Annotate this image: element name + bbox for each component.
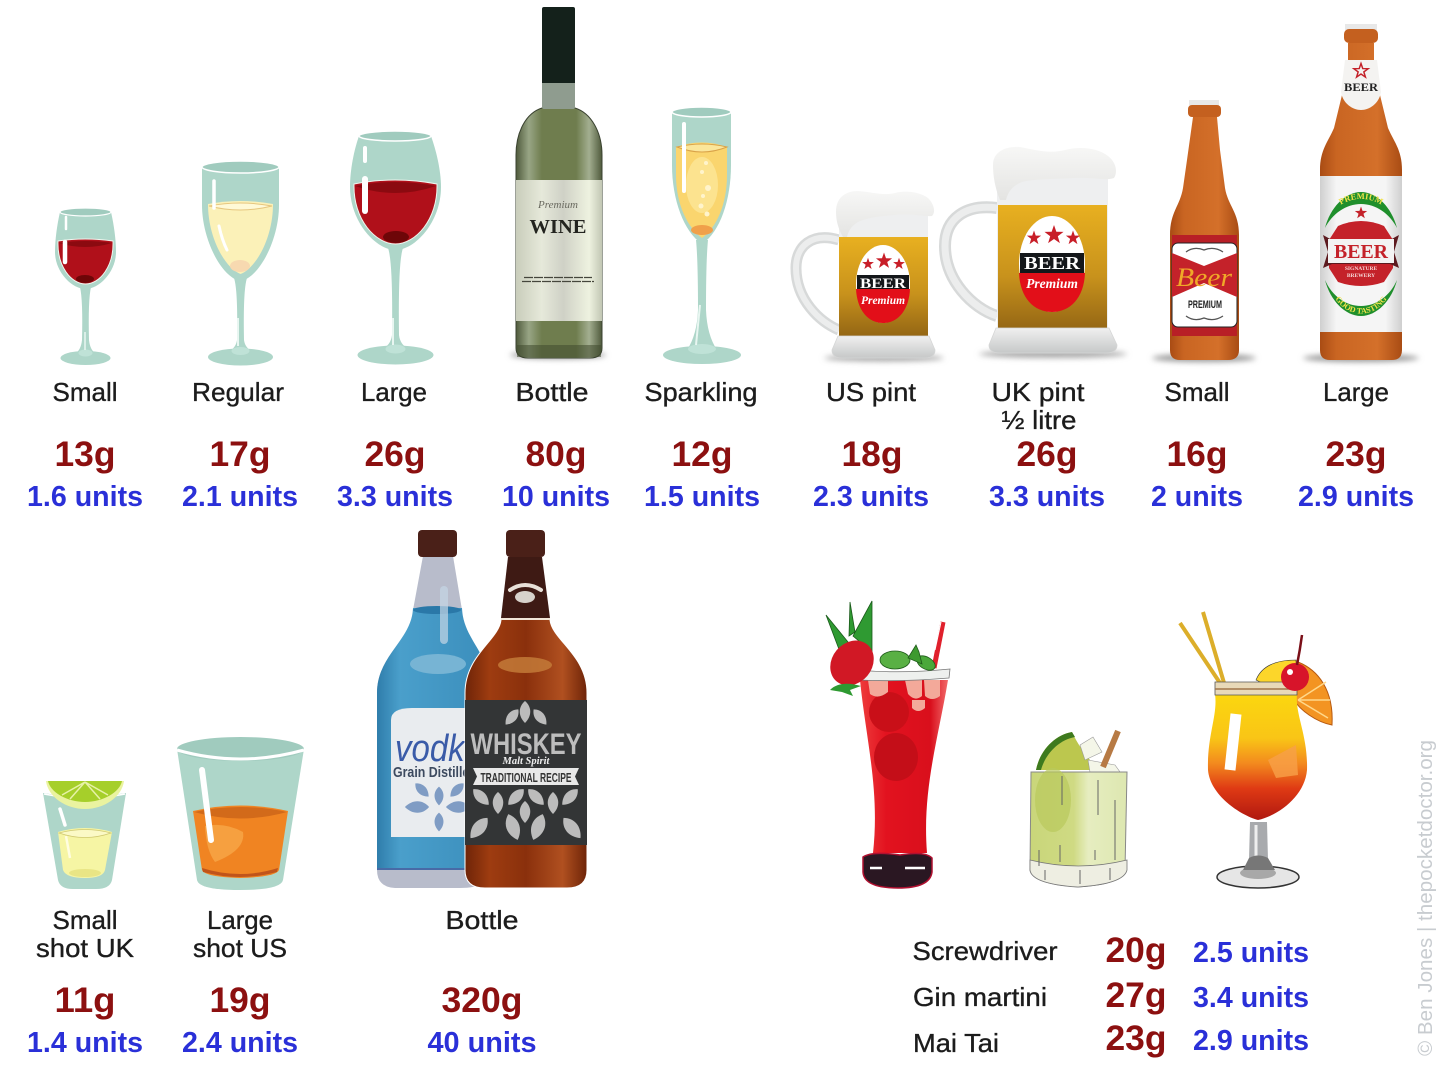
row: mai tai — [913, 1019, 1309, 1058]
icon: screwdriver cocktail — [821, 601, 950, 888]
label: Small — [52, 377, 118, 407]
grams: 19g — [210, 981, 270, 1020]
units: 40 units — [428, 1027, 536, 1059]
icon: small red wine glass — [55, 208, 116, 365]
credit: vertical watermark: © Ben Jones | thepocketdoctor.org — [1415, 740, 1437, 1056]
units: 1.4 units — [27, 1027, 143, 1059]
label text: vodka: vodka — [395, 728, 483, 770]
drink: large wine — [337, 131, 453, 513]
drink: large shot US — [177, 737, 304, 1059]
icon: small shot glass with lime — [43, 781, 126, 889]
label: Bottle — [446, 905, 518, 935]
icon: large red wine glass — [350, 131, 441, 364]
units: 3.3 units — [337, 481, 453, 513]
grams: 12g — [672, 435, 732, 474]
drink: large beer bottle — [1298, 24, 1420, 513]
label text: BEER — [860, 276, 907, 292]
label: ½ litre — [1002, 405, 1076, 435]
grams: 11g — [54, 981, 116, 1020]
drink: small wine — [27, 208, 143, 513]
label text: BEER — [1024, 253, 1081, 273]
label: Regular — [192, 377, 284, 407]
row: gin martini: 3.4 units — [1193, 982, 1309, 1014]
grams: 16g — [1166, 435, 1228, 474]
label: Large — [1323, 377, 1389, 407]
label: Sparkling — [644, 377, 758, 407]
grams: 23g — [1326, 435, 1386, 474]
units: 2.3 units — [813, 481, 929, 513]
label text: premium: Premium — [537, 199, 578, 211]
label: Small — [52, 905, 118, 935]
label text: wine: WINE — [530, 216, 586, 238]
drink: small beer bottle — [1151, 100, 1256, 513]
row: screwdriver: Screwdriver — [912, 936, 1058, 966]
row: screwdriver — [912, 931, 1309, 970]
section: beer — [790, 24, 1420, 513]
main label text: BEER — [1334, 241, 1389, 263]
icon: small beer mug — [796, 191, 944, 362]
row: mai tai: 23g — [1106, 1019, 1166, 1058]
label text: whiskey: WHISKEY — [470, 728, 582, 761]
label: Large — [361, 377, 427, 407]
label — [992, 377, 1085, 435]
label text: Beer: Beer — [1176, 263, 1233, 292]
icon: vodka bottle — [377, 530, 480, 888]
label — [193, 905, 287, 963]
row: screwdriver: 2.5 units — [1193, 937, 1309, 969]
label: UK pint — [992, 377, 1085, 407]
section: cocktails — [821, 601, 1332, 1058]
section: wine — [27, 7, 760, 513]
units: 1.6 units — [27, 481, 143, 513]
row: mai tai: Mai Tai — [913, 1028, 999, 1058]
icon: large shot glass with amber spirit — [177, 737, 304, 890]
drink: small shot UK — [27, 781, 143, 1059]
section: spirits — [27, 530, 587, 1059]
label text: grain distillery: Grain Distillery — [393, 764, 482, 781]
units: 2.1 units — [182, 481, 298, 513]
icon: regular white wine glass — [202, 161, 279, 366]
grams: 320g — [442, 981, 522, 1020]
label: US pint — [826, 377, 917, 407]
neck label text: BEER — [1344, 82, 1379, 94]
sub label text: SIGNATURE — [1345, 266, 1377, 272]
label — [36, 905, 135, 963]
row: gin martini: Gin martini — [913, 982, 1047, 1012]
drink: UK pint — [945, 147, 1127, 513]
label: Bottle — [516, 377, 588, 407]
row: mai tai: 2.9 units — [1193, 1025, 1309, 1057]
label text: PREMIUM: PREMIUM — [1188, 299, 1222, 311]
icon: mai tai cocktail — [1180, 612, 1332, 888]
drink: US pint — [796, 191, 944, 513]
grams: 13g — [54, 435, 116, 474]
grams: 26g — [364, 435, 426, 474]
units: 2.9 units — [1298, 481, 1414, 513]
arc text: PREMIUM — [1338, 193, 1384, 205]
icon: gin martini cocktail — [1030, 731, 1127, 887]
label text: Premium — [861, 295, 905, 307]
table: cocktail alcohol content — [912, 931, 1309, 1058]
label text: malt spirit: Malt Spirit — [502, 756, 551, 767]
row: gin martini — [913, 976, 1309, 1015]
label text: traditional recipe: TRADITIONAL RECIPE — [480, 770, 572, 785]
units: 10 units — [502, 481, 610, 513]
sub label text: BREWERY — [1347, 273, 1375, 279]
units: 1.5 units — [644, 481, 760, 513]
drink: sparkling wine — [644, 107, 760, 513]
label: shot US — [193, 933, 287, 963]
grams: 80g — [526, 435, 586, 474]
units: 2.4 units — [182, 1027, 298, 1059]
grams: 26g — [1016, 435, 1078, 474]
icon: wine bottle — [510, 7, 606, 359]
arc text: GOOD TASTING — [1336, 296, 1386, 314]
label: Small — [1164, 377, 1230, 407]
grams: 18g — [842, 435, 902, 474]
icon: large beer mug — [945, 147, 1127, 358]
drink: regular wine — [182, 161, 298, 513]
label: shot UK — [36, 933, 135, 963]
units: 2 units — [1151, 481, 1243, 513]
sub label text — [1345, 266, 1377, 279]
label: Large — [207, 905, 273, 935]
icon: champagne flute — [663, 107, 741, 364]
units: 3.3 units — [989, 481, 1105, 513]
drink: spirit bottles — [377, 530, 587, 1059]
drink: wine bottle — [502, 7, 610, 513]
row: gin martini: 27g — [1106, 976, 1166, 1015]
row: screwdriver: 20g — [1106, 931, 1166, 970]
label text: Premium — [1026, 276, 1078, 291]
icon: large beer bottle — [1302, 24, 1420, 366]
grams: 17g — [210, 435, 270, 474]
icon: whiskey bottle — [465, 530, 587, 888]
icon: small beer bottle — [1152, 100, 1256, 362]
